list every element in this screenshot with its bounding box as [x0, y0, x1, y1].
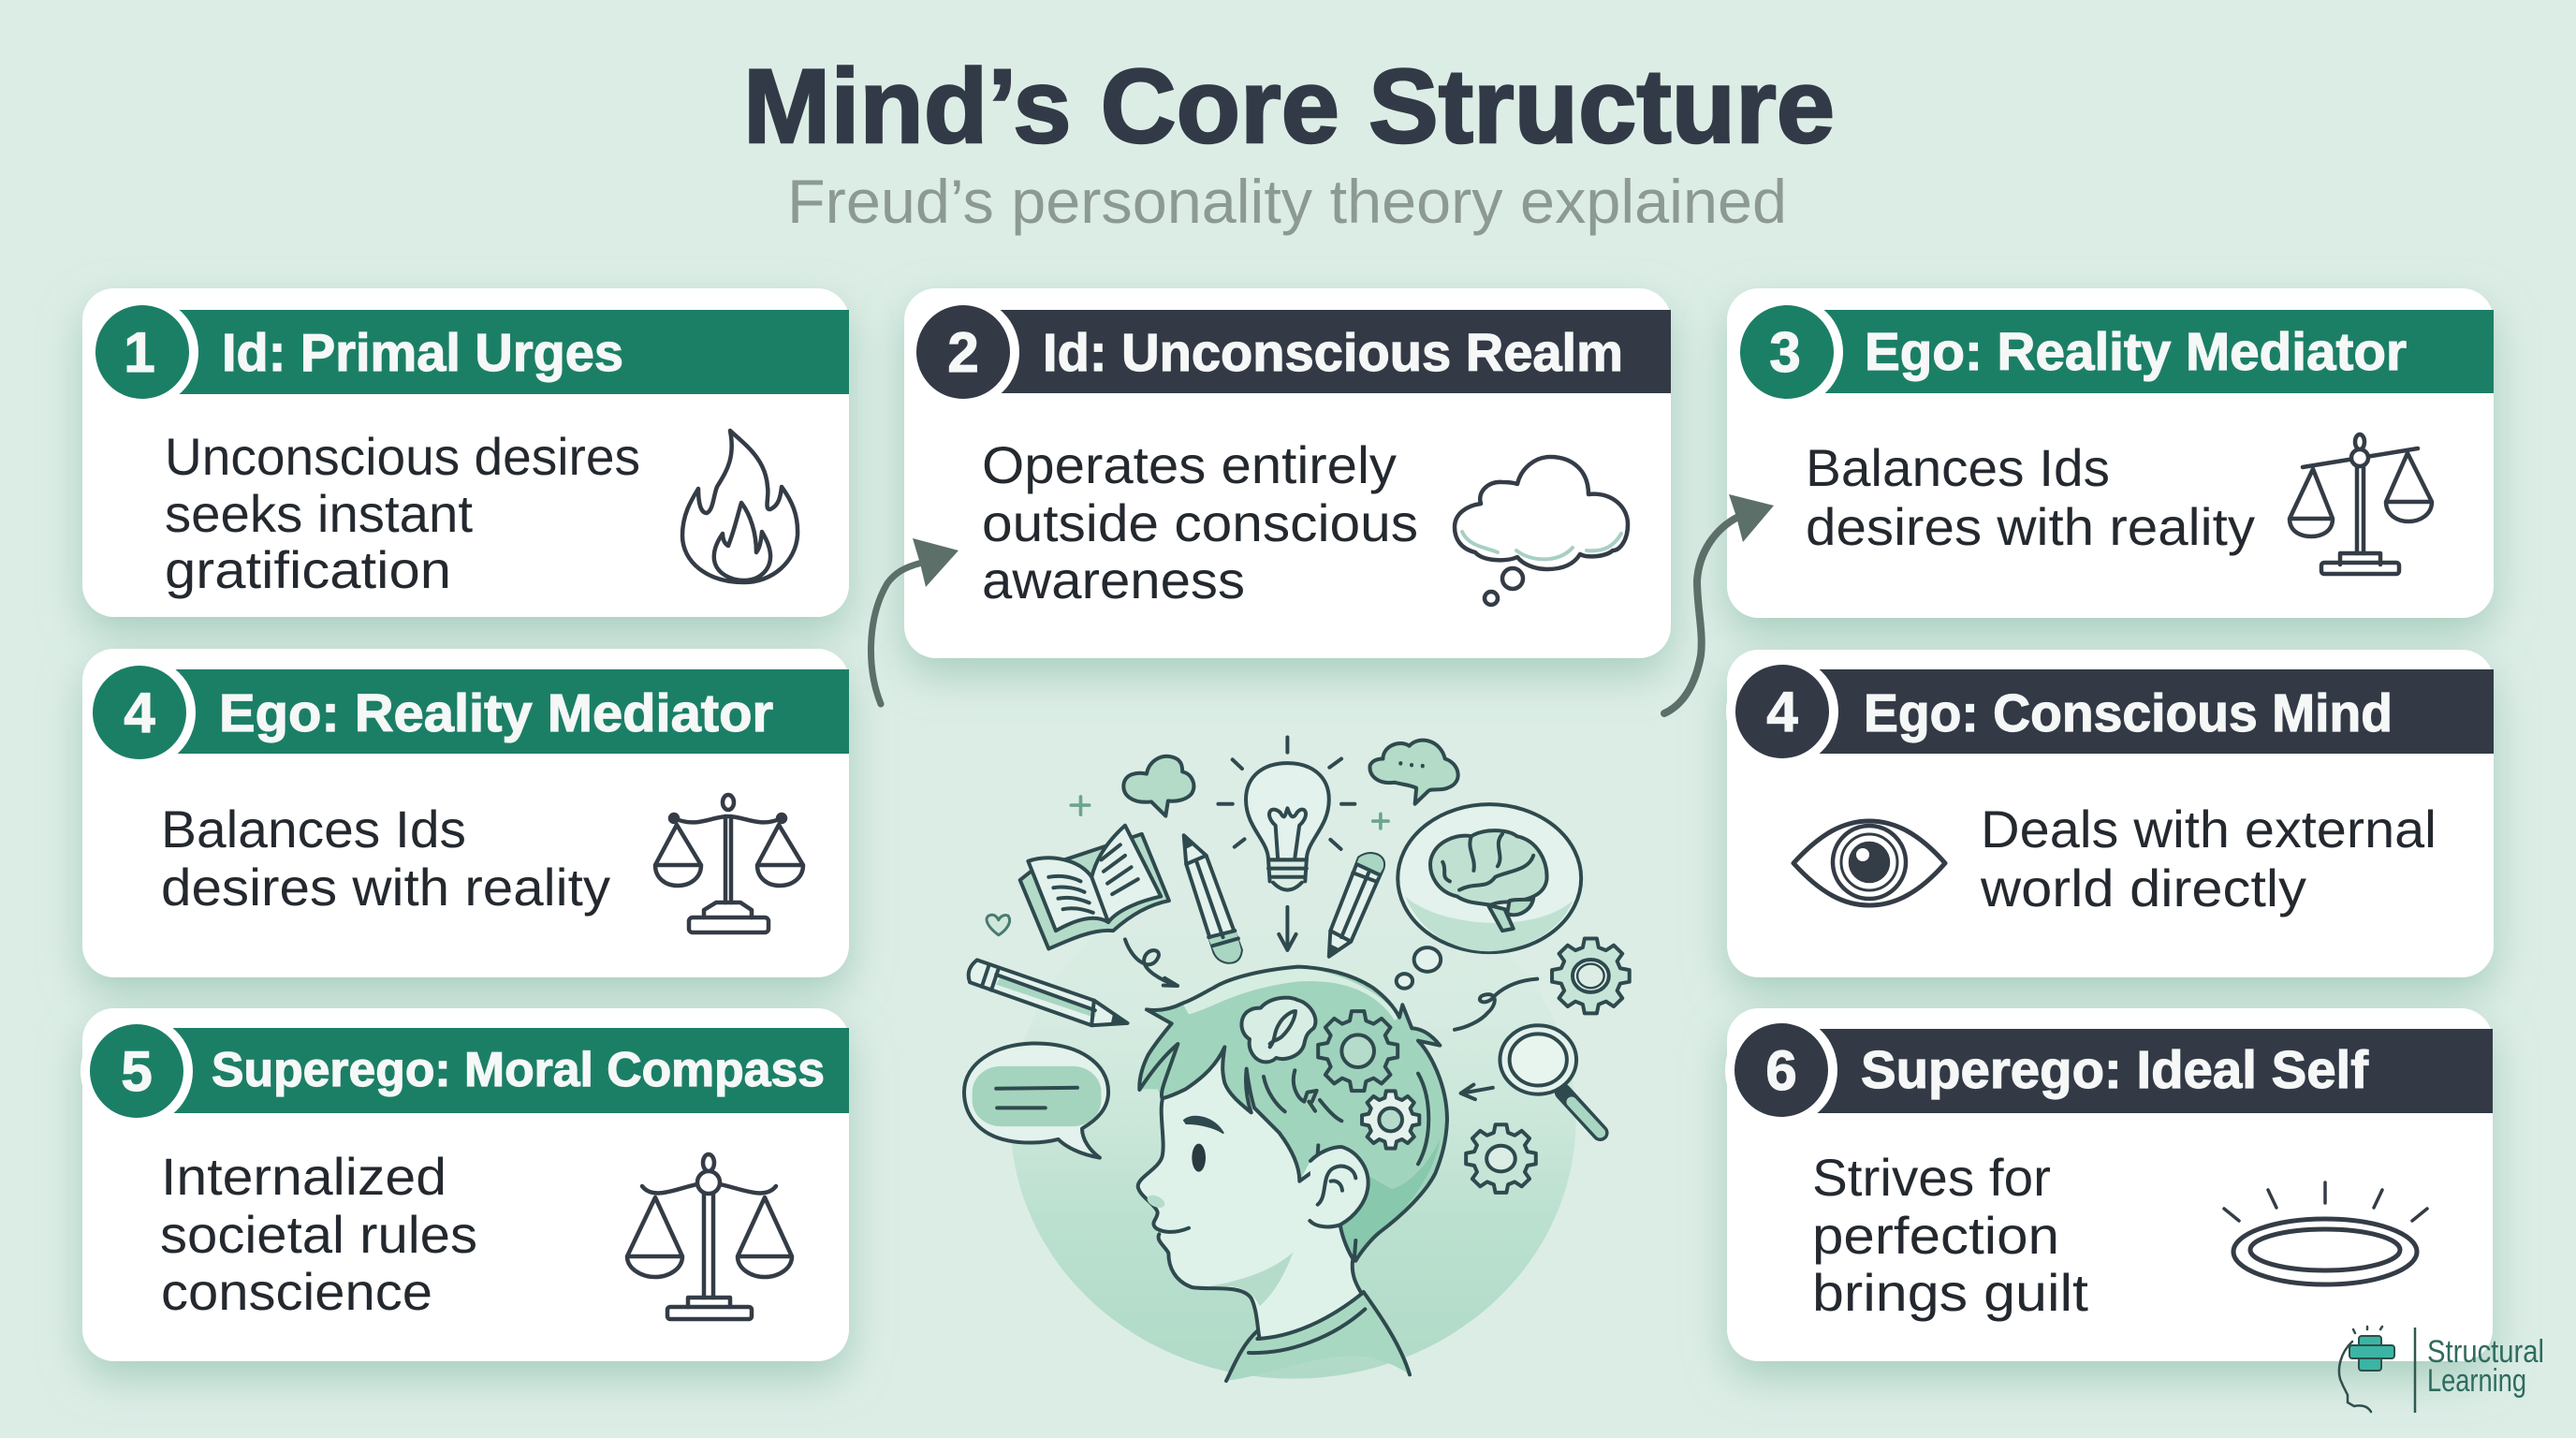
- heading: Superego: Ideal Self: [1861, 1040, 2369, 1100]
- logo: Structural Learning: [2339, 1327, 2544, 1413]
- panel: card 4 Ego conscious mind: [1726, 650, 2494, 977]
- number badge: [83, 656, 196, 769]
- header bar: [1787, 310, 2494, 393]
- arrow: card 2 to card 3: [1664, 494, 1774, 713]
- illustration: student head with ideas: [964, 738, 1630, 1381]
- squiggle arrow: right: [1455, 979, 1537, 1030]
- pencil: left: [969, 960, 1127, 1025]
- body text: Operates entirely: [982, 435, 1397, 494]
- speech bubble: [964, 1043, 1108, 1158]
- number badge: 4: [1766, 681, 1798, 743]
- body text: Internalized: [161, 1147, 446, 1206]
- body text: Strives for: [1812, 1148, 2051, 1207]
- gear: top right: [1552, 938, 1630, 1013]
- panel: card 6 Superego ideal self: [1725, 1008, 2493, 1361]
- gear: lower right: [1466, 1124, 1536, 1193]
- body text: Balances Ids: [1806, 438, 2110, 497]
- face and neck: [1138, 1061, 1362, 1339]
- arrow: down to head: [1279, 907, 1296, 950]
- body text: brings guilt: [1812, 1263, 2088, 1322]
- body text: outside conscious: [982, 493, 1418, 552]
- ear: [1310, 1147, 1368, 1226]
- shirt: [1226, 1292, 1410, 1381]
- squiggle arrow: left: [1125, 939, 1178, 986]
- body text: Balances Ids: [161, 800, 466, 858]
- logo text: [2427, 1334, 2544, 1399]
- hair outline: [1139, 967, 1447, 1261]
- number badge: 6: [1765, 1039, 1797, 1102]
- panel: card 4 Ego reality mediator: [82, 649, 849, 977]
- body text: conscience: [161, 1262, 432, 1321]
- body text: desires with reality: [1806, 497, 2255, 556]
- body text: societal rules: [160, 1205, 477, 1264]
- arrow: card 1 to card 2: [871, 538, 959, 704]
- panel: card 1 Id primal urges: [82, 288, 849, 617]
- header bar: [137, 1028, 849, 1113]
- heading: Id: Unconscious Realm: [1043, 323, 1623, 383]
- body text: [160, 1147, 477, 1321]
- face outline: [1138, 1100, 1361, 1339]
- body text: perfection: [1812, 1206, 2059, 1265]
- logo mark: [2339, 1327, 2415, 1413]
- brain thought bubble: [1397, 804, 1581, 989]
- heading: Ego: Reality Mediator: [1865, 322, 2407, 382]
- body text: [1980, 800, 2437, 917]
- background disc: [1010, 861, 1576, 1379]
- cloud: top left: [1123, 756, 1193, 816]
- body text: gratification: [165, 540, 451, 599]
- icon: curved scales: [655, 795, 803, 932]
- number badge: 1: [124, 321, 155, 384]
- pencil: centre left: [1184, 835, 1241, 962]
- number badge: [907, 296, 1019, 408]
- body text: [161, 800, 610, 917]
- body text: [1812, 1148, 2088, 1322]
- shirt outline: [1226, 1292, 1410, 1381]
- body text: [1806, 438, 2255, 556]
- gears in head: [1318, 1011, 1419, 1149]
- eye and eyebrow: [1184, 1117, 1223, 1172]
- number badge: 2: [947, 321, 979, 384]
- plus signs and heart: [987, 797, 1388, 935]
- nose shadow: [1146, 1193, 1166, 1211]
- icon: tilted scales: [2290, 434, 2432, 574]
- number badge: 4: [124, 682, 155, 744]
- head: [1138, 967, 1447, 1381]
- panel: card 3 Ego reality mediator: [1727, 288, 2494, 618]
- heading: Id: Primal Urges: [222, 323, 623, 383]
- icon: lightbulb: [1218, 738, 1354, 890]
- book: [1020, 826, 1169, 948]
- cloud: top right: [1370, 741, 1458, 804]
- pencil: centre right: [1329, 854, 1383, 957]
- header bar: [142, 310, 849, 394]
- icon: thought cloud: [1455, 457, 1628, 605]
- heading: Ego: Reality Mediator: [219, 683, 773, 743]
- body text: world directly: [1980, 858, 2306, 917]
- icon: flame: [682, 431, 798, 582]
- body text: desires with reality: [161, 858, 610, 917]
- heading: Superego: Moral Compass: [212, 1043, 825, 1097]
- icon: magnifying glass: [1500, 1025, 1601, 1133]
- logo text: Structural: [2427, 1334, 2544, 1370]
- subtitle: Freud’s personality theory explained: [787, 167, 1787, 236]
- number badge: [80, 1015, 193, 1127]
- hair: [1139, 967, 1447, 1261]
- surrounding icons: [964, 738, 1630, 1379]
- number badge: [86, 296, 198, 408]
- body text: Deals with external: [1981, 800, 2437, 858]
- neck shadow: [1208, 1252, 1294, 1306]
- body text: seeks instant: [165, 484, 473, 543]
- body text: Unconscious desires: [165, 427, 640, 486]
- panel: card 5 Superego moral compass: [80, 1008, 849, 1361]
- icon: large scales: [627, 1154, 792, 1319]
- header bar: [1781, 1029, 2493, 1113]
- number badge: [1731, 296, 1843, 408]
- hair highlight: [1182, 967, 1399, 1020]
- number badge: [1725, 1014, 1837, 1126]
- logo text: Learning: [2427, 1363, 2526, 1399]
- body text: [982, 435, 1418, 609]
- arrow: left from magnifier: [1461, 1085, 1493, 1099]
- number badge: 3: [1769, 321, 1801, 384]
- number badge: [1726, 655, 1838, 768]
- icon: halo: [2224, 1182, 2427, 1284]
- icon: eye: [1793, 821, 1945, 905]
- panel: card 2 Id unconscious realm: [904, 288, 1671, 658]
- title: Mind’s Core Structure: [743, 48, 1835, 165]
- number badge: 5: [121, 1040, 153, 1103]
- heading: Ego: Conscious Mind: [1864, 683, 2393, 743]
- body text: [165, 427, 640, 599]
- hair strands: [1264, 1070, 1428, 1164]
- hair shadow: [1341, 1139, 1440, 1261]
- header bar: [963, 310, 1671, 393]
- body text: awareness: [982, 550, 1245, 609]
- header bar: [1782, 669, 2494, 754]
- header bar: [139, 669, 849, 754]
- thought cloud in head: [1241, 998, 1315, 1062]
